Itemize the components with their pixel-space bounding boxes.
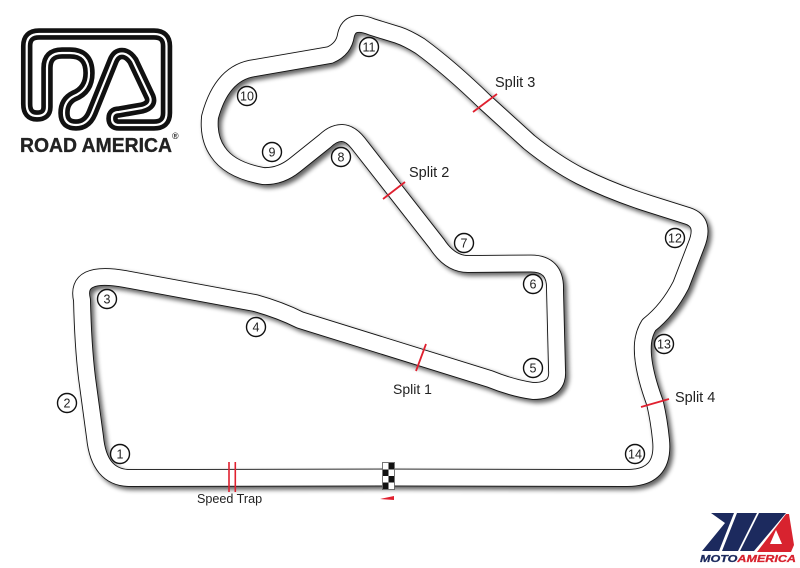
turn number labels: 9 — [269, 146, 276, 160]
turn number labels: 5 — [530, 362, 537, 376]
split 4 marker — [641, 399, 669, 407]
logo stripes — [702, 513, 794, 552]
logo wordmark: ROAD AMERICA — [20, 134, 172, 157]
turn number labels: 11 — [363, 40, 376, 54]
split 3 label: Split 3 — [495, 75, 535, 91]
turn number labels: 2 — [64, 396, 71, 410]
turn number labels: 13 — [657, 338, 671, 352]
track circuit — [81, 24, 703, 481]
split 2 marker — [383, 182, 405, 199]
turn number labels: 6 — [530, 278, 537, 292]
speed trap markers — [229, 462, 235, 492]
turn number labels: 7 — [461, 236, 468, 250]
turn numbers — [58, 38, 684, 464]
turn number labels: 4 — [253, 320, 260, 334]
turn number labels: 3 — [104, 292, 111, 306]
logo: Road America — [20, 34, 179, 157]
logo wordmark: MOTO AMERICA — [700, 553, 796, 565]
logo track mark — [27, 34, 167, 125]
split 1 marker — [416, 344, 426, 371]
turn number labels: 10 — [240, 90, 254, 104]
registered mark: ® — [172, 131, 179, 141]
turn number labels: 8 — [338, 150, 345, 164]
turn number labels: 1 — [117, 448, 124, 462]
direction arrow — [380, 496, 394, 500]
split 4 label: Split 4 — [675, 390, 715, 406]
split 3 marker — [473, 94, 497, 112]
split 1 label: Split 1 — [393, 381, 432, 397]
logo: MotoAmerica — [700, 513, 796, 565]
turn number labels: 12 — [668, 232, 682, 246]
speed trap label: Speed Trap — [197, 492, 262, 506]
turn number labels: 14 — [628, 448, 642, 462]
turn number labels — [64, 40, 682, 462]
split 2 label: Split 2 — [409, 165, 449, 181]
start finish checker flag — [382, 462, 394, 490]
